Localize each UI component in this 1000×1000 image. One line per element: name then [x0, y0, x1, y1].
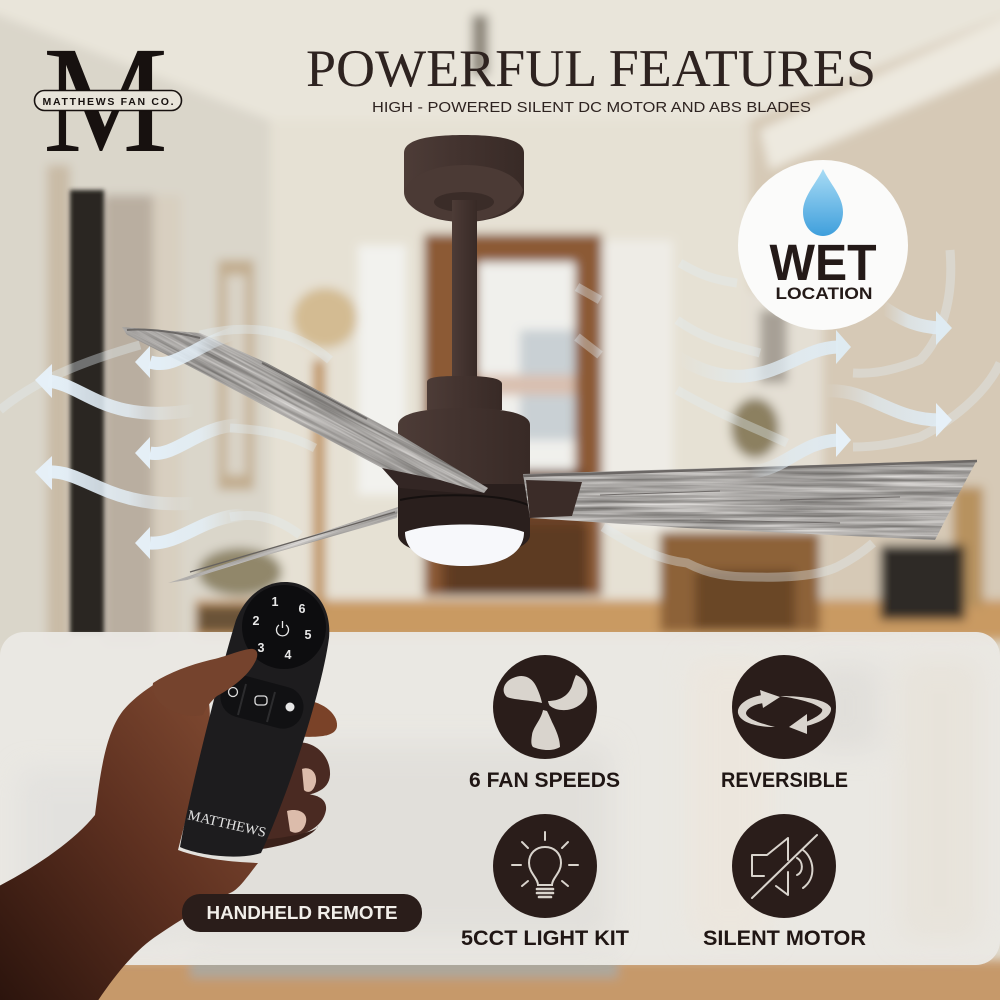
- panel: translucent features panel: [0, 632, 1000, 965]
- feature: silent motor: [703, 814, 866, 950]
- badge: wet location: LOCATION: [776, 284, 872, 303]
- badge: wet location: WET: [770, 234, 876, 291]
- icon: fan: [504, 675, 587, 750]
- badge: wet location: [738, 160, 908, 330]
- blade: left lower: [168, 507, 398, 583]
- feature: silent motor: SILENT MOTOR: [703, 927, 866, 950]
- feature: 5cct light kit: 5CCT LIGHT KIT: [461, 927, 629, 950]
- remote dial: 2: [253, 614, 260, 628]
- remote dial: 5: [305, 628, 312, 642]
- remote dial: 3: [258, 641, 265, 655]
- fingers behind remote: [255, 700, 337, 850]
- remote brand: MATTHEWS: [186, 808, 267, 841]
- remote dial: 6: [299, 602, 306, 616]
- remote buttons: [216, 671, 308, 733]
- fingernails: [287, 768, 316, 833]
- icon: muted speaker: [752, 835, 817, 898]
- remote dial: 1: [272, 595, 279, 609]
- feature: 5cct light kit: [461, 814, 629, 950]
- airflow arrows: [35, 307, 952, 559]
- remote dial: [242, 585, 326, 669]
- bracket: left blade: [382, 467, 482, 494]
- arrowheads: [35, 311, 952, 559]
- icon: rotation arrows: [738, 690, 831, 734]
- label: handheld remote: HANDHELD REMOTE: [206, 902, 398, 923]
- hand holding remote: [0, 582, 337, 1000]
- feature: 6 fan speeds: [469, 655, 620, 792]
- feature: reversible: REVERSIBLE: [721, 769, 848, 792]
- feature: reversible: [721, 655, 848, 792]
- blade: right: [523, 460, 977, 540]
- title: POWERFUL FEATURES: [306, 40, 876, 98]
- logo band: [34, 90, 182, 110]
- faint swirl lines: [0, 250, 1000, 577]
- right arrow ribbons: [677, 307, 940, 472]
- light kit: [405, 524, 524, 566]
- logo band: MATTHEWS FAN CO.: [42, 96, 174, 108]
- icon: light bulb: [512, 832, 578, 897]
- downrod: [452, 200, 477, 380]
- motor housing: [398, 376, 530, 558]
- feature: 6 fan speeds: 6 FAN SPEEDS: [469, 769, 620, 792]
- logo: M: [43, 16, 168, 185]
- label: handheld remote: [182, 894, 422, 932]
- remote control: [180, 582, 329, 857]
- ceiling fan: [60, 135, 990, 608]
- thumb: [153, 649, 257, 716]
- arm and palm: [0, 667, 258, 1000]
- subtitle: HIGH - POWERED SILENT DC MOTOR AND ABS BLADES: [372, 100, 811, 116]
- icon: water drop: [803, 169, 843, 236]
- remote dial: 4: [285, 648, 292, 662]
- left arrow ribbons: [48, 333, 245, 543]
- blade: left upper: [122, 327, 488, 493]
- fan canopy: [404, 135, 524, 222]
